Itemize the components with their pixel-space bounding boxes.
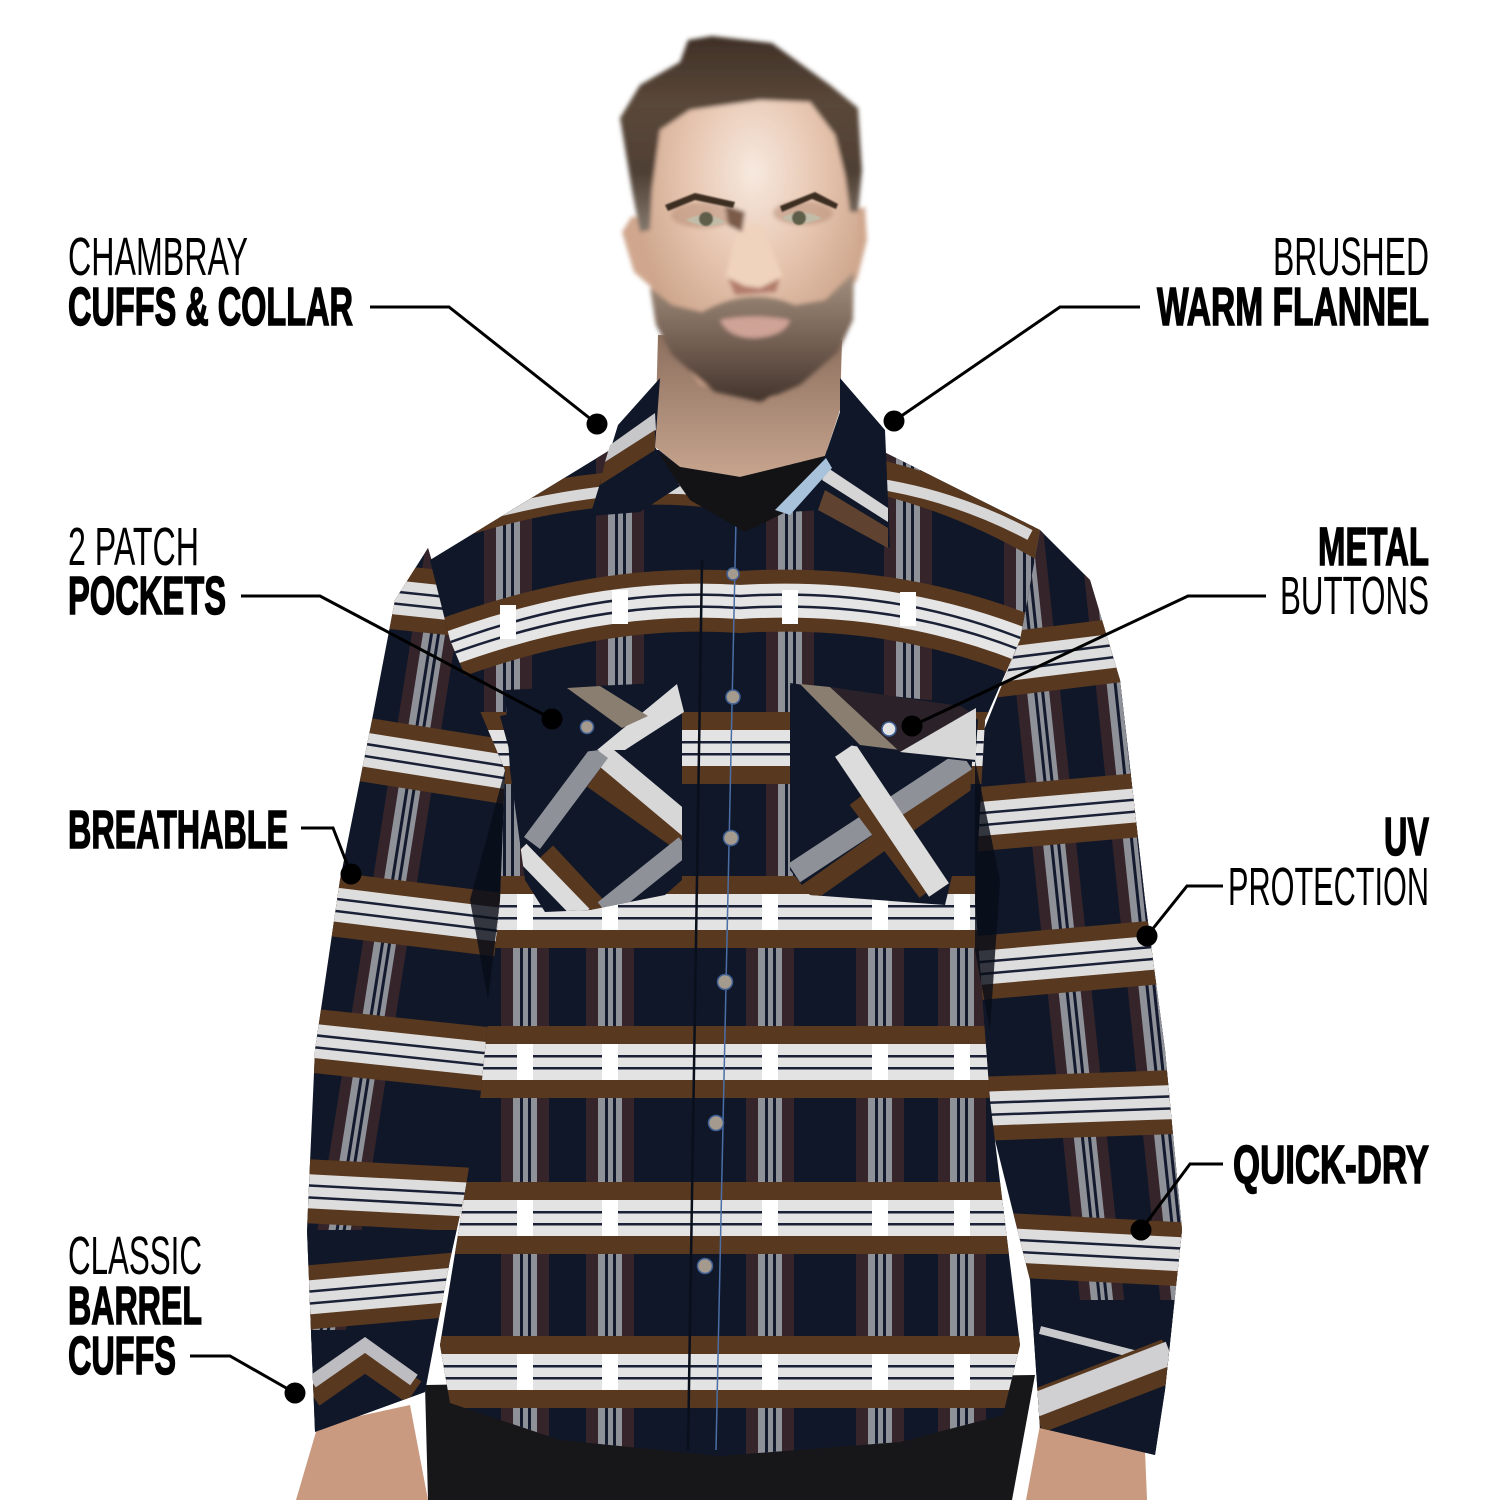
nose [726,225,782,290]
neck [655,335,842,477]
callout: 2 patch pockets [68,517,562,730]
left chest pocket [500,684,684,912]
callout: 2 patch pockets: 2 PATCH [68,517,199,577]
hand: left [296,1405,428,1500]
sleeve: right [975,530,1182,1455]
callout: classic barrel cuffs: CLASSIC [68,1226,202,1286]
callout: classic barrel cuffs: CUFFS [68,1326,176,1386]
ears [622,207,867,295]
eye sockets [671,201,833,228]
callout: classic barrel cuffs [68,1226,306,1404]
collar [590,378,890,548]
callout: chambray cuffs & collar [68,227,608,434]
hand: right [1026,1425,1147,1500]
mouth [720,316,790,338]
black t-shirt [655,450,825,532]
pocket flap [790,683,978,762]
callout: uv protection [1136,807,1429,946]
face [640,83,858,400]
head [620,36,867,402]
eyes [686,211,822,226]
callout: metal buttons: METAL [1318,517,1429,577]
right chest pocket [785,680,980,915]
callout: metal buttons [902,517,1429,736]
callout: breathable [68,800,362,884]
shirt body with plaid [410,445,1070,1460]
sleeve: left [307,548,505,1432]
callout: classic barrel cuffs: BARREL [68,1276,202,1336]
shirt buttons [580,568,896,1274]
armpit shadows [470,760,1000,1030]
callout: chambray cuffs & collar: CUFFS & COLLAR [68,277,353,337]
callout: chambray cuffs & collar: CHAMBRAY [68,227,248,287]
hair [620,36,862,232]
nose shadow [728,278,780,295]
man: head, shirt, hands [242,32,1187,1500]
callout: breathable: BREATHABLE [68,800,288,860]
eyebrows [665,192,838,212]
beard [650,272,854,402]
callout: brushed warm flannel [884,227,1429,432]
callout: uv protection: UV [1384,807,1429,867]
pocket flap [500,681,682,760]
callout: 2 patch pockets: POCKETS [68,566,226,626]
trousers [425,1375,1035,1500]
callout: quick-dry [1130,1135,1429,1240]
inner-eye shadow [725,205,745,232]
